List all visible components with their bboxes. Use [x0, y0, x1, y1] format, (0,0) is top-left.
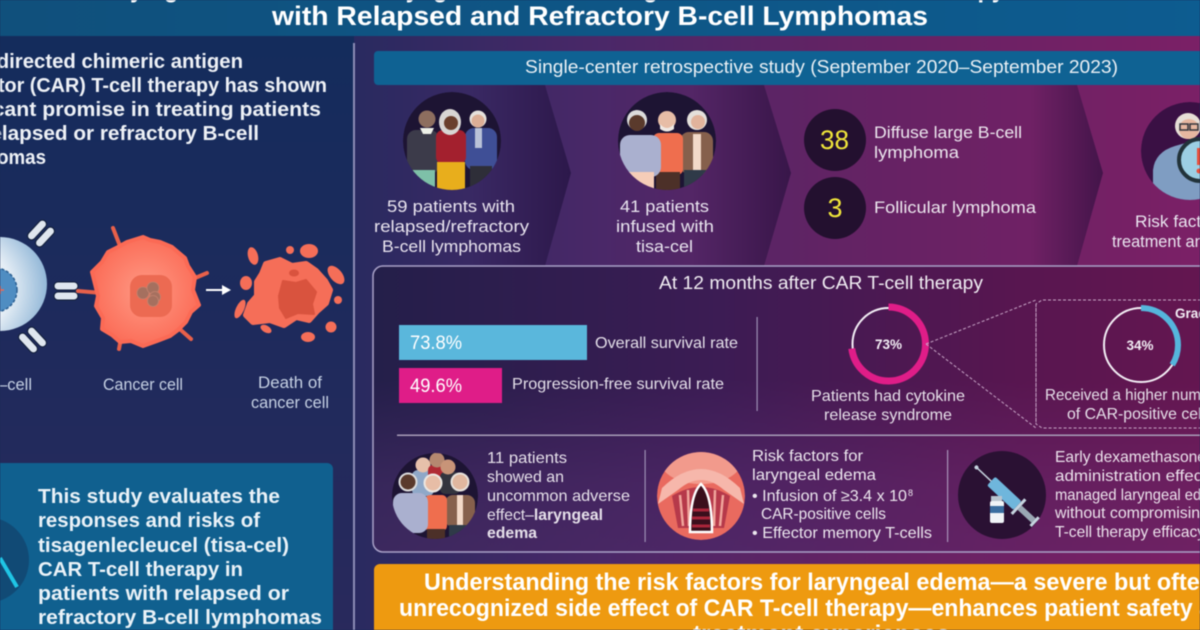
icon: CAR T-cell [0, 218, 78, 355]
arrow: cancer cell to death [206, 285, 231, 295]
text: uncommon adverse effect: 11 patients [487, 450, 567, 467]
donut chart: grade 34% [1045, 306, 1200, 423]
text: uncommon adverse effect [487, 450, 630, 542]
donut chart: cytokine release syndrome 73%: Patients had cytokine [811, 388, 965, 405]
patients label: relapsed/refractory [374, 218, 530, 236]
conclusion banner [374, 564, 1200, 630]
icon: 11 patients group [392, 452, 478, 541]
header band with title: with Relapsed and Refractory B-cell Lymphomas [271, 1, 928, 31]
panel: study aim: tisagenlecleucel (tisa-cel) [38, 534, 289, 557]
icon: syringe and vial [958, 451, 1046, 539]
panel: 12 month outcomes [373, 266, 1200, 552]
panel heading: At 12 months after CAR T-cell therapy [659, 273, 983, 293]
text: uncommon adverse effect: edema [487, 525, 537, 542]
infused label: infused with [616, 218, 714, 236]
text: risk factors for laryngeal edema: • Infusion of ≥3.4 x 10 [752, 488, 907, 505]
icon: larynx [657, 440, 745, 540]
text: dexamethasone management [1054, 449, 1200, 541]
text: uncommon adverse effect: showed an [487, 469, 564, 486]
stat: 3 follicular lymphoma: Follicular lymphoma [874, 199, 1037, 217]
stat: 38 diffuse large B-cell lymphoma: lymphoma [874, 144, 960, 162]
donut chart: cytokine release syndrome 73%: release syndrome [824, 407, 952, 424]
study design band [374, 51, 1200, 85]
panel: left background [0, 36, 354, 630]
donut chart: cytokine release syndrome 73% [811, 307, 965, 424]
chevron shading: subtypes to risk factors [1030, 85, 1103, 266]
header band with title [0, 0, 1200, 36]
icon: risk factor patient with alert [1141, 102, 1200, 200]
donut chart: grade 34%: 34% [1126, 338, 1154, 353]
panel: study aim [0, 463, 333, 630]
infused label [616, 198, 714, 256]
icon: death of cancer cell [232, 244, 348, 342]
panel: study aim: CAR T-cell therapy in [38, 558, 243, 581]
callout: dashed connector box [926, 300, 1200, 428]
panel: study aim: patients with relapsed or [38, 582, 289, 605]
cell labels: Cancer cell [103, 376, 183, 394]
patients label: B-cell lymphomas [382, 238, 521, 256]
divider: left and right columns [353, 43, 355, 630]
cell labels: cancer cell [251, 394, 329, 412]
bar chart: survival rates [399, 325, 738, 403]
stat: 38 diffuse large B-cell lymphoma [804, 109, 1022, 171]
infused label: tisa-cel [636, 238, 693, 256]
study design band: Single-center retrospective study (September 2020–September 2023) [525, 56, 1118, 77]
panel: study aim: responses and risks of [38, 509, 260, 532]
icon: cancer cell [78, 228, 207, 349]
donut chart: cytokine release syndrome 73%: 73% [875, 337, 902, 352]
cell labels: Death of [258, 374, 322, 392]
bar chart: survival rates: 73.8% [410, 332, 462, 354]
text: risk factors for laryngeal edema [752, 448, 932, 542]
stat: 3 follicular lymphoma: 3 [827, 193, 843, 223]
text: uncommon adverse effect: uncommon adverse [487, 488, 630, 505]
background intro text [0, 50, 327, 169]
panel: study aim: refractory B-cell lymphomas [38, 606, 322, 629]
icon: 41 patients group [618, 92, 716, 192]
icon: 59 patients group [403, 92, 501, 192]
text: uncommon adverse effect: effect–laryngeal [487, 507, 603, 524]
risk factors label [1112, 213, 1200, 251]
cell labels [0, 374, 329, 412]
chevron shading: patients to infused [470, 85, 571, 266]
patients label: 59 patients with [387, 198, 515, 216]
bar chart: survival rates: Overall survival rate [595, 335, 738, 352]
stat: 38 diffuse large B-cell lymphoma: 38 [820, 125, 849, 155]
bar chart: survival rates: Progression-free survival rate [512, 376, 724, 393]
stat: 38 diffuse large B-cell lymphoma: Diffuse large B-cell [874, 124, 1022, 142]
stat: 3 follicular lymphoma [804, 177, 1037, 239]
text: risk factors for laryngeal edema: • Effector memory T-cells [752, 525, 932, 542]
text: risk factors for laryngeal edema: 8 [908, 488, 913, 498]
patients label [374, 198, 530, 256]
text: risk factors for laryngeal edema: Risk factors for [752, 448, 864, 465]
chevron shading: infused to subtypes [690, 85, 791, 266]
text: risk factors for laryngeal edema: CAR-positive cells [761, 506, 886, 523]
infused label: 41 patients [620, 198, 709, 216]
text: risk factors for laryngeal edema: laryngeal edema [752, 467, 876, 484]
panel: study aim: This study evaluates the [38, 485, 280, 508]
bar chart: survival rates: 49.6% [410, 375, 462, 397]
icon: magnifier [0, 517, 29, 603]
